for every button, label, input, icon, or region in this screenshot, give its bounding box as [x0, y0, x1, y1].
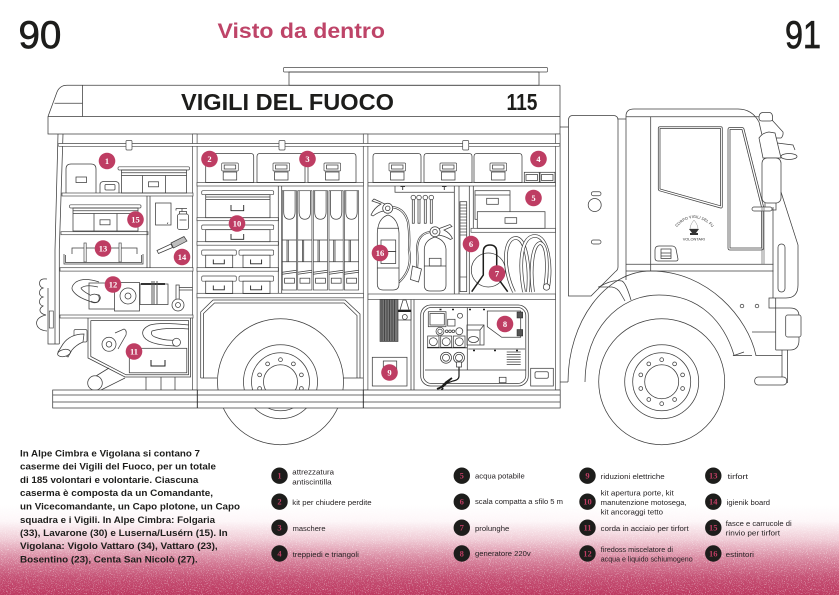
legend column 3: corda in acciaio per tirfort — [601, 524, 690, 533]
item: firedoss mixer — [72, 280, 192, 311]
number badges on illustration: 5 — [531, 193, 536, 203]
legend column 2: 5 — [460, 471, 464, 481]
legend column 2: 8 — [460, 548, 464, 558]
item: igienik board — [157, 236, 187, 254]
background: crimson grain fade — [0, 505, 839, 595]
item: coiled hose — [506, 236, 550, 292]
intro text block: un Vicecomandante, un Capo plotone, un Capo — [20, 502, 240, 512]
item: extension cords spool — [471, 245, 508, 292]
number badges on illustration: 16 — [376, 248, 384, 258]
intro text block: (33), Lavarone (30) e Luserna/Lusérn (15). In — [20, 528, 228, 538]
wheel arch — [568, 271, 756, 382]
page number left: 90 — [18, 14, 61, 57]
legend column 2: scala compatta a sfilo 5 m — [475, 497, 563, 506]
item: small extinguisher — [410, 224, 452, 291]
legend column 3: firedoss miscelatore di — [601, 545, 673, 554]
fire truck illustration — [36, 67, 802, 446]
legend column 4 — [705, 468, 792, 562]
legend column 1: maschere — [293, 524, 326, 533]
legend column 1: attrezzatura — [292, 468, 335, 476]
side skirt — [53, 390, 560, 408]
item: drawers kit — [202, 191, 274, 294]
item: steel rope drum bay — [88, 318, 190, 377]
item: antispark kit — [66, 164, 190, 193]
legend column 3: kit ancoraggi tetto — [601, 508, 663, 517]
truck name: VIGILI DEL FUOCO — [181, 89, 394, 115]
legend column 4: estintori — [726, 550, 754, 559]
legend column 4: 14 — [709, 497, 718, 507]
legend column 2: generatore 220v — [475, 549, 531, 558]
item: pulley straps crate — [70, 205, 141, 231]
item: water boxes — [475, 191, 545, 228]
legend column 2: prolunghe — [475, 524, 509, 533]
door handle — [655, 246, 678, 261]
intro text block: Vigolana: Vigolo Vattaro (34), Vattaro (23), — [20, 541, 218, 551]
item: compact ladder — [460, 202, 467, 292]
front wheel — [599, 319, 725, 445]
legend column 1: 4 — [277, 548, 282, 558]
legend column 1: 3 — [277, 523, 282, 533]
intro text block: caserme dei Vigili del Fuoco, per un totale — [20, 462, 216, 472]
number badges on illustration: 15 — [131, 214, 140, 224]
number badges on illustration: 6 — [469, 239, 473, 249]
legend — [271, 468, 792, 564]
legend column 3: acqua e liquido schiumogeno — [601, 555, 693, 564]
item: large extinguisher — [371, 199, 410, 290]
compartment pillars and rail — [58, 134, 560, 390]
legend column 2: 7 — [460, 523, 465, 533]
item: 220v generator — [421, 305, 528, 391]
item: side box — [531, 368, 553, 386]
legend column 3: manutenzione motosega, — [601, 498, 687, 507]
number badges on illustration: 3 — [305, 154, 310, 164]
legend column 3: 10 — [583, 497, 592, 507]
legend column 4: 13 — [709, 471, 718, 481]
number badges on illustration: 14 — [178, 252, 187, 262]
legend column 1: 2 — [277, 497, 282, 507]
intro text block: In Alpe Cimbra e Vigolana si contano 7 — [20, 448, 200, 458]
roof rack — [284, 68, 548, 85]
legend column 4: tirfort — [728, 472, 749, 481]
intro text block: caserma è composta da un Comandante, — [20, 488, 213, 498]
cab front — [740, 192, 801, 385]
legend column 3: kit apertura porte, kit — [601, 489, 675, 498]
rear wheel arch — [201, 300, 363, 378]
item: suction pipe — [57, 330, 87, 358]
legend column 1: antiscintilla — [292, 478, 332, 486]
compartment: left upper — [60, 164, 193, 318]
legend column 4: igienik board — [727, 498, 770, 507]
rear frame and bumper details — [36, 134, 63, 344]
legend column 3: 9 — [585, 471, 590, 481]
legend column 3: riduzioni elettriche — [601, 472, 665, 481]
legend column 2: acqua potabile — [475, 472, 525, 480]
compartment: right lower with generator — [372, 300, 553, 391]
legend column 1: kit per chiudere perdite — [292, 498, 372, 507]
legend column 1 — [271, 468, 372, 562]
item: tirfort — [64, 243, 143, 264]
item: rear roller — [88, 368, 175, 390]
legend column 4: fasce e carrucole di — [726, 519, 792, 528]
door emblem: CORPO VIGILI DEL FUOCO — [676, 215, 714, 227]
door quarter window — [728, 128, 764, 250]
item: hose reducers — [372, 300, 411, 386]
number badges on illustration: 2 — [207, 154, 212, 164]
compartment: left lower with firedoss — [57, 280, 192, 390]
number badges on illustration: 7 — [495, 268, 500, 278]
item: masks lockers — [282, 191, 359, 290]
number badges on illustration: 13 — [99, 244, 107, 254]
legend column 4: 16 — [709, 548, 718, 558]
rear wheel — [218, 319, 344, 445]
intro text block: Bosentino (23), Centa San Nicolò (27). — [20, 554, 198, 564]
compartment: right upper — [368, 154, 556, 300]
item: tablet and bottle — [156, 203, 188, 230]
mirrors — [752, 112, 797, 264]
number badges on illustration: 1 — [105, 156, 109, 166]
number badges on illustration: 11 — [130, 346, 138, 356]
truck number: 115 — [506, 89, 538, 115]
legend column 3: 12 — [583, 548, 592, 558]
number badges on illustration: 9 — [387, 368, 392, 378]
legend column 1: 1 — [277, 471, 282, 481]
door emblem: VOLONTARI — [683, 236, 705, 242]
page number right: 91 — [785, 14, 821, 57]
number badges on illustration: 4 — [536, 154, 541, 164]
item: tool row — [411, 195, 434, 223]
legend column 2 — [454, 468, 563, 562]
number badges on illustration — [95, 151, 547, 381]
intro text block — [20, 448, 240, 564]
legend column 3: 11 — [583, 523, 592, 533]
number badges on illustration: 12 — [109, 280, 117, 290]
intro text block: di 185 volontari e volontarie. Ciascuna — [20, 475, 199, 485]
legend column 4: rinvio per tirfort — [726, 529, 781, 538]
truck cab — [568, 108, 802, 386]
cab window — [658, 127, 722, 208]
number badges on illustration: 8 — [503, 319, 507, 329]
legend column 4: 15 — [709, 523, 718, 533]
number badges on illustration: 10 — [233, 218, 241, 228]
door emblem — [676, 215, 714, 242]
item: tripods boxes — [524, 172, 555, 182]
legend column 1: treppiedi e triangoli — [293, 550, 359, 559]
compartment: centre with drawers and masks — [197, 154, 364, 378]
title: Visto da dentro — [218, 19, 385, 43]
legend column 2: 6 — [460, 497, 464, 507]
cab rear box — [560, 116, 626, 382]
truck body upper panel — [48, 85, 560, 408]
intro text block: squadra e i Vigili. In Alpe Cimbra: Folgaria — [20, 515, 216, 525]
legend column 3 — [579, 468, 693, 564]
